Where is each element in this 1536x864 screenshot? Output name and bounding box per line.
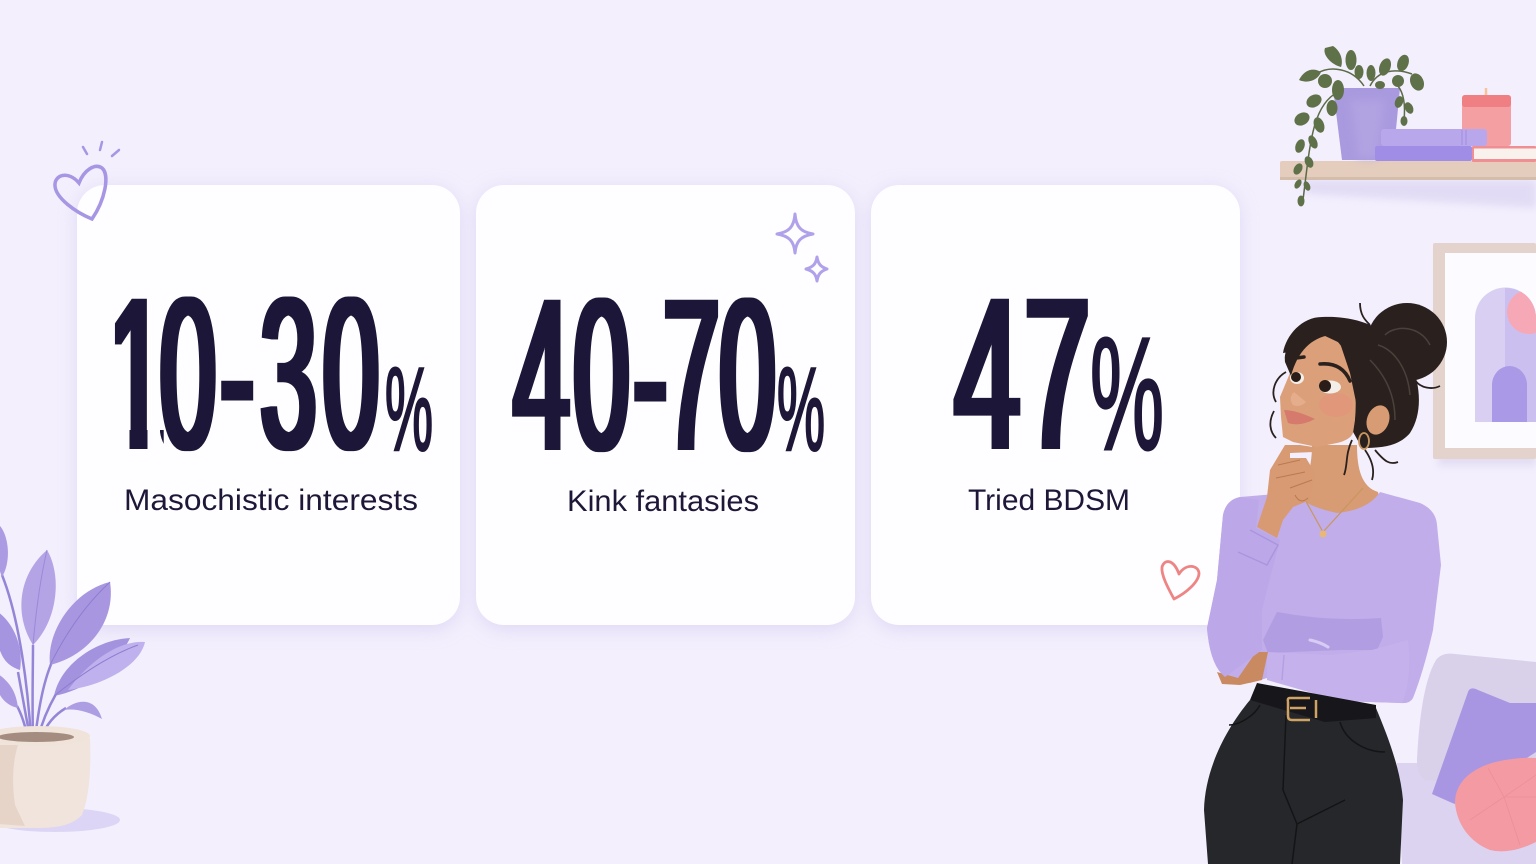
stacked books [1375,129,1536,162]
necklace [1303,488,1363,532]
card shadows [77,188,1240,630]
neck and chest [1295,445,1385,525]
ear [1363,402,1393,438]
label 1: Masochistic interests [124,484,418,517]
raised sleeve [1207,497,1280,677]
framed art on wall [1433,243,1536,466]
label 3: Tried BDSM [968,484,1130,517]
jeans [1204,700,1403,864]
sleeve cuff line [1238,530,1278,565]
stat card 3: tried BDSM [871,185,1240,625]
candle [1462,88,1511,146]
front hair [1285,322,1370,425]
face [1280,335,1357,447]
earring [1359,433,1369,449]
figure 40-70 percent: 40-70 [514,257,775,495]
icon: pink heart [1162,562,1199,599]
eyes [1290,372,1341,394]
blush [1319,393,1353,417]
potted vine plant [1292,46,1427,206]
hair highlights [1370,328,1430,420]
hair back and bun [1283,303,1447,448]
nose [1291,392,1306,406]
belt [1250,683,1376,722]
stat card 1: masochistic interests: % [385,344,433,476]
forearm and hand [1257,445,1315,538]
hand at waist [1217,652,1268,685]
figure 47 percent: 47 [955,254,1090,493]
finger lines [1276,460,1312,501]
icon: purple heart with rays [55,142,119,219]
curls [1270,303,1440,480]
character: thoughtful woman [1204,303,1447,864]
lips [1284,410,1315,424]
stat card 2: kink fantasies [476,185,855,625]
sweater [1207,492,1441,703]
percent sign 3: % [1090,304,1164,483]
stat card 2: kink fantasies: % [777,344,825,476]
stat card 1: masochistic interests [77,185,460,625]
eyebrows [1296,357,1350,381]
icon: large sparkle [777,214,813,253]
pendant [1320,530,1326,538]
potted plant left [0,526,145,832]
label 2: Kink fantasies [567,485,759,518]
wall shelf with plant, books and candle [1280,46,1536,208]
icon: small sparkle [806,257,827,281]
sofa with cushions [1397,654,1536,864]
plant pot [0,726,90,828]
figure 10-30 percent: 10-30 [109,256,379,494]
